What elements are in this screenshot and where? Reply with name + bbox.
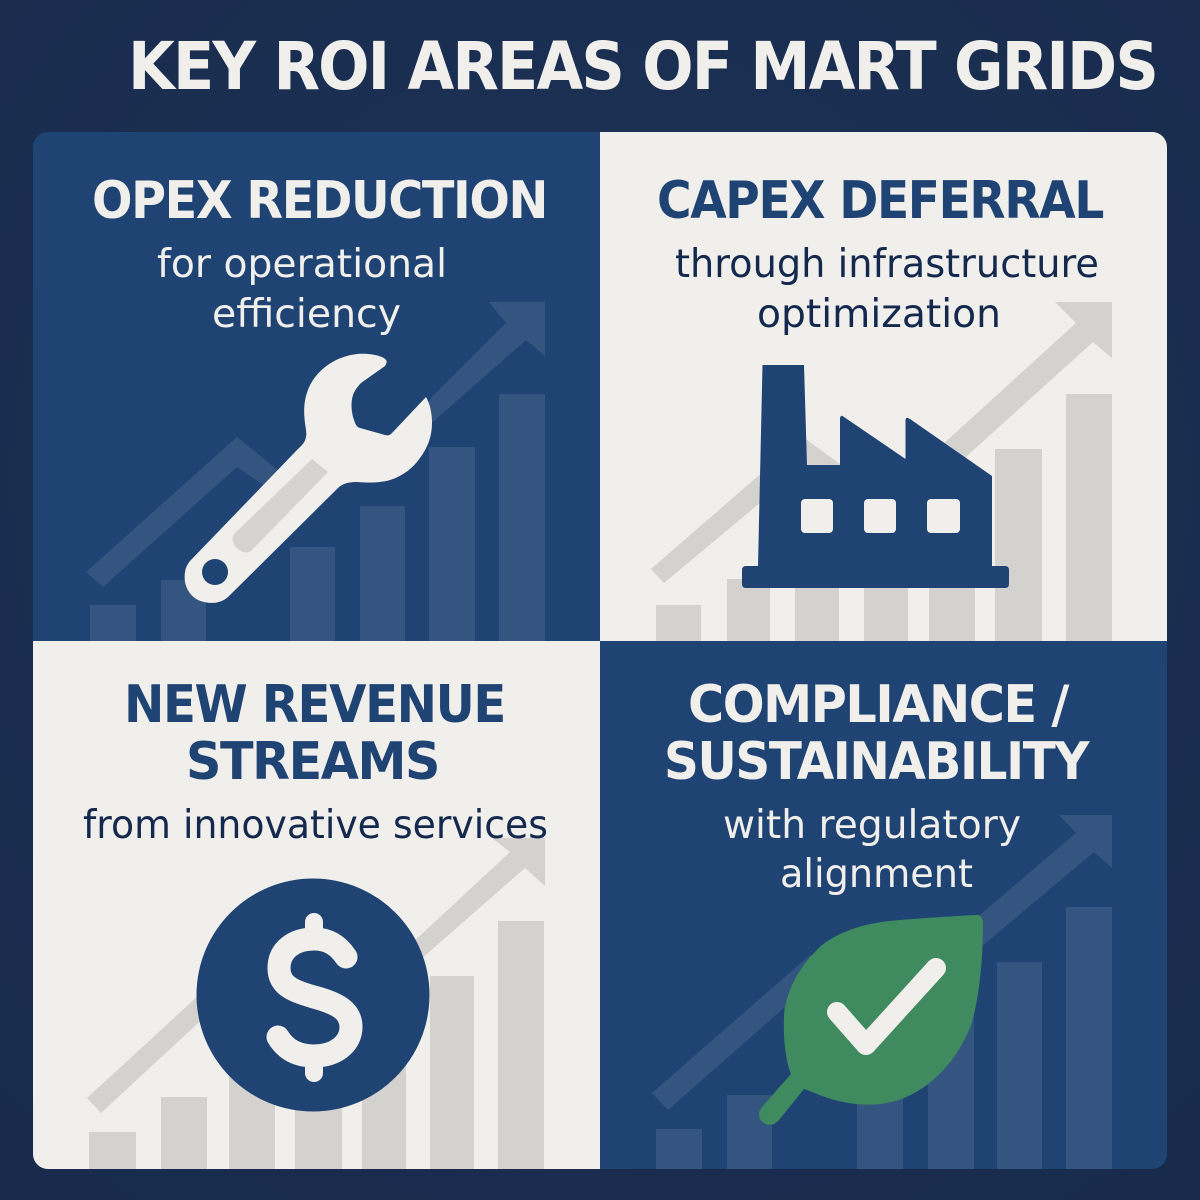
- subtitle: with regulatory alignment: with regulatory: [723, 803, 1021, 848]
- heading: OPEX reduction: OPEX REDUCTION: [92, 171, 547, 231]
- subtitle: through infrastructure optimization: through infrastructure: [675, 242, 1099, 287]
- subtitle: from innovative services: from innovative services: [83, 803, 548, 848]
- subtitle: with regulatory alignment: [723, 803, 1021, 897]
- panel: compliance / sustainability: [600, 641, 1167, 1169]
- subtitle: for operational efficiency: efficiency: [212, 292, 401, 337]
- heading: new revenue streams: [128, 684, 503, 780]
- chart: rising bars and arrow: [652, 815, 1112, 1169]
- chart: rising bars and arrow: [651, 302, 1112, 641]
- subtitle: through infrastructure optimization: [675, 242, 1099, 337]
- heading: new revenue streams: STREAMS: [186, 732, 439, 792]
- heading: new revenue streams: NEW REVENUE: [124, 675, 505, 735]
- panel: new revenue streams: [33, 641, 600, 1169]
- icon: dollar coin: [196, 878, 430, 1112]
- subtitle: with regulatory alignment: alignment: [780, 852, 973, 897]
- panel: CAPEX deferral: [600, 132, 1167, 641]
- icon: leaf with check mark: [759, 915, 983, 1125]
- subtitle: for operational efficiency: for operational: [157, 242, 447, 287]
- chart: rising bars and arrow: [86, 302, 545, 641]
- chart: rising bars and arrow: [87, 838, 545, 1169]
- heading: CAPEX deferral: CAPEX DEFERRAL: [657, 171, 1103, 231]
- subtitle: through infrastructure optimization: optimization: [757, 292, 1001, 337]
- heading: compliance / sustainability: COMPLIANCE /: [688, 675, 1069, 735]
- icon: wrench: [185, 354, 432, 603]
- heading: compliance / sustainability: SUSTAINABILITY: [664, 732, 1091, 792]
- icon: factory: [742, 365, 1009, 588]
- subtitle: for operational efficiency: [157, 242, 447, 337]
- panel: OPEX reduction: [33, 132, 600, 641]
- heading: compliance / sustainability: [668, 684, 1090, 780]
